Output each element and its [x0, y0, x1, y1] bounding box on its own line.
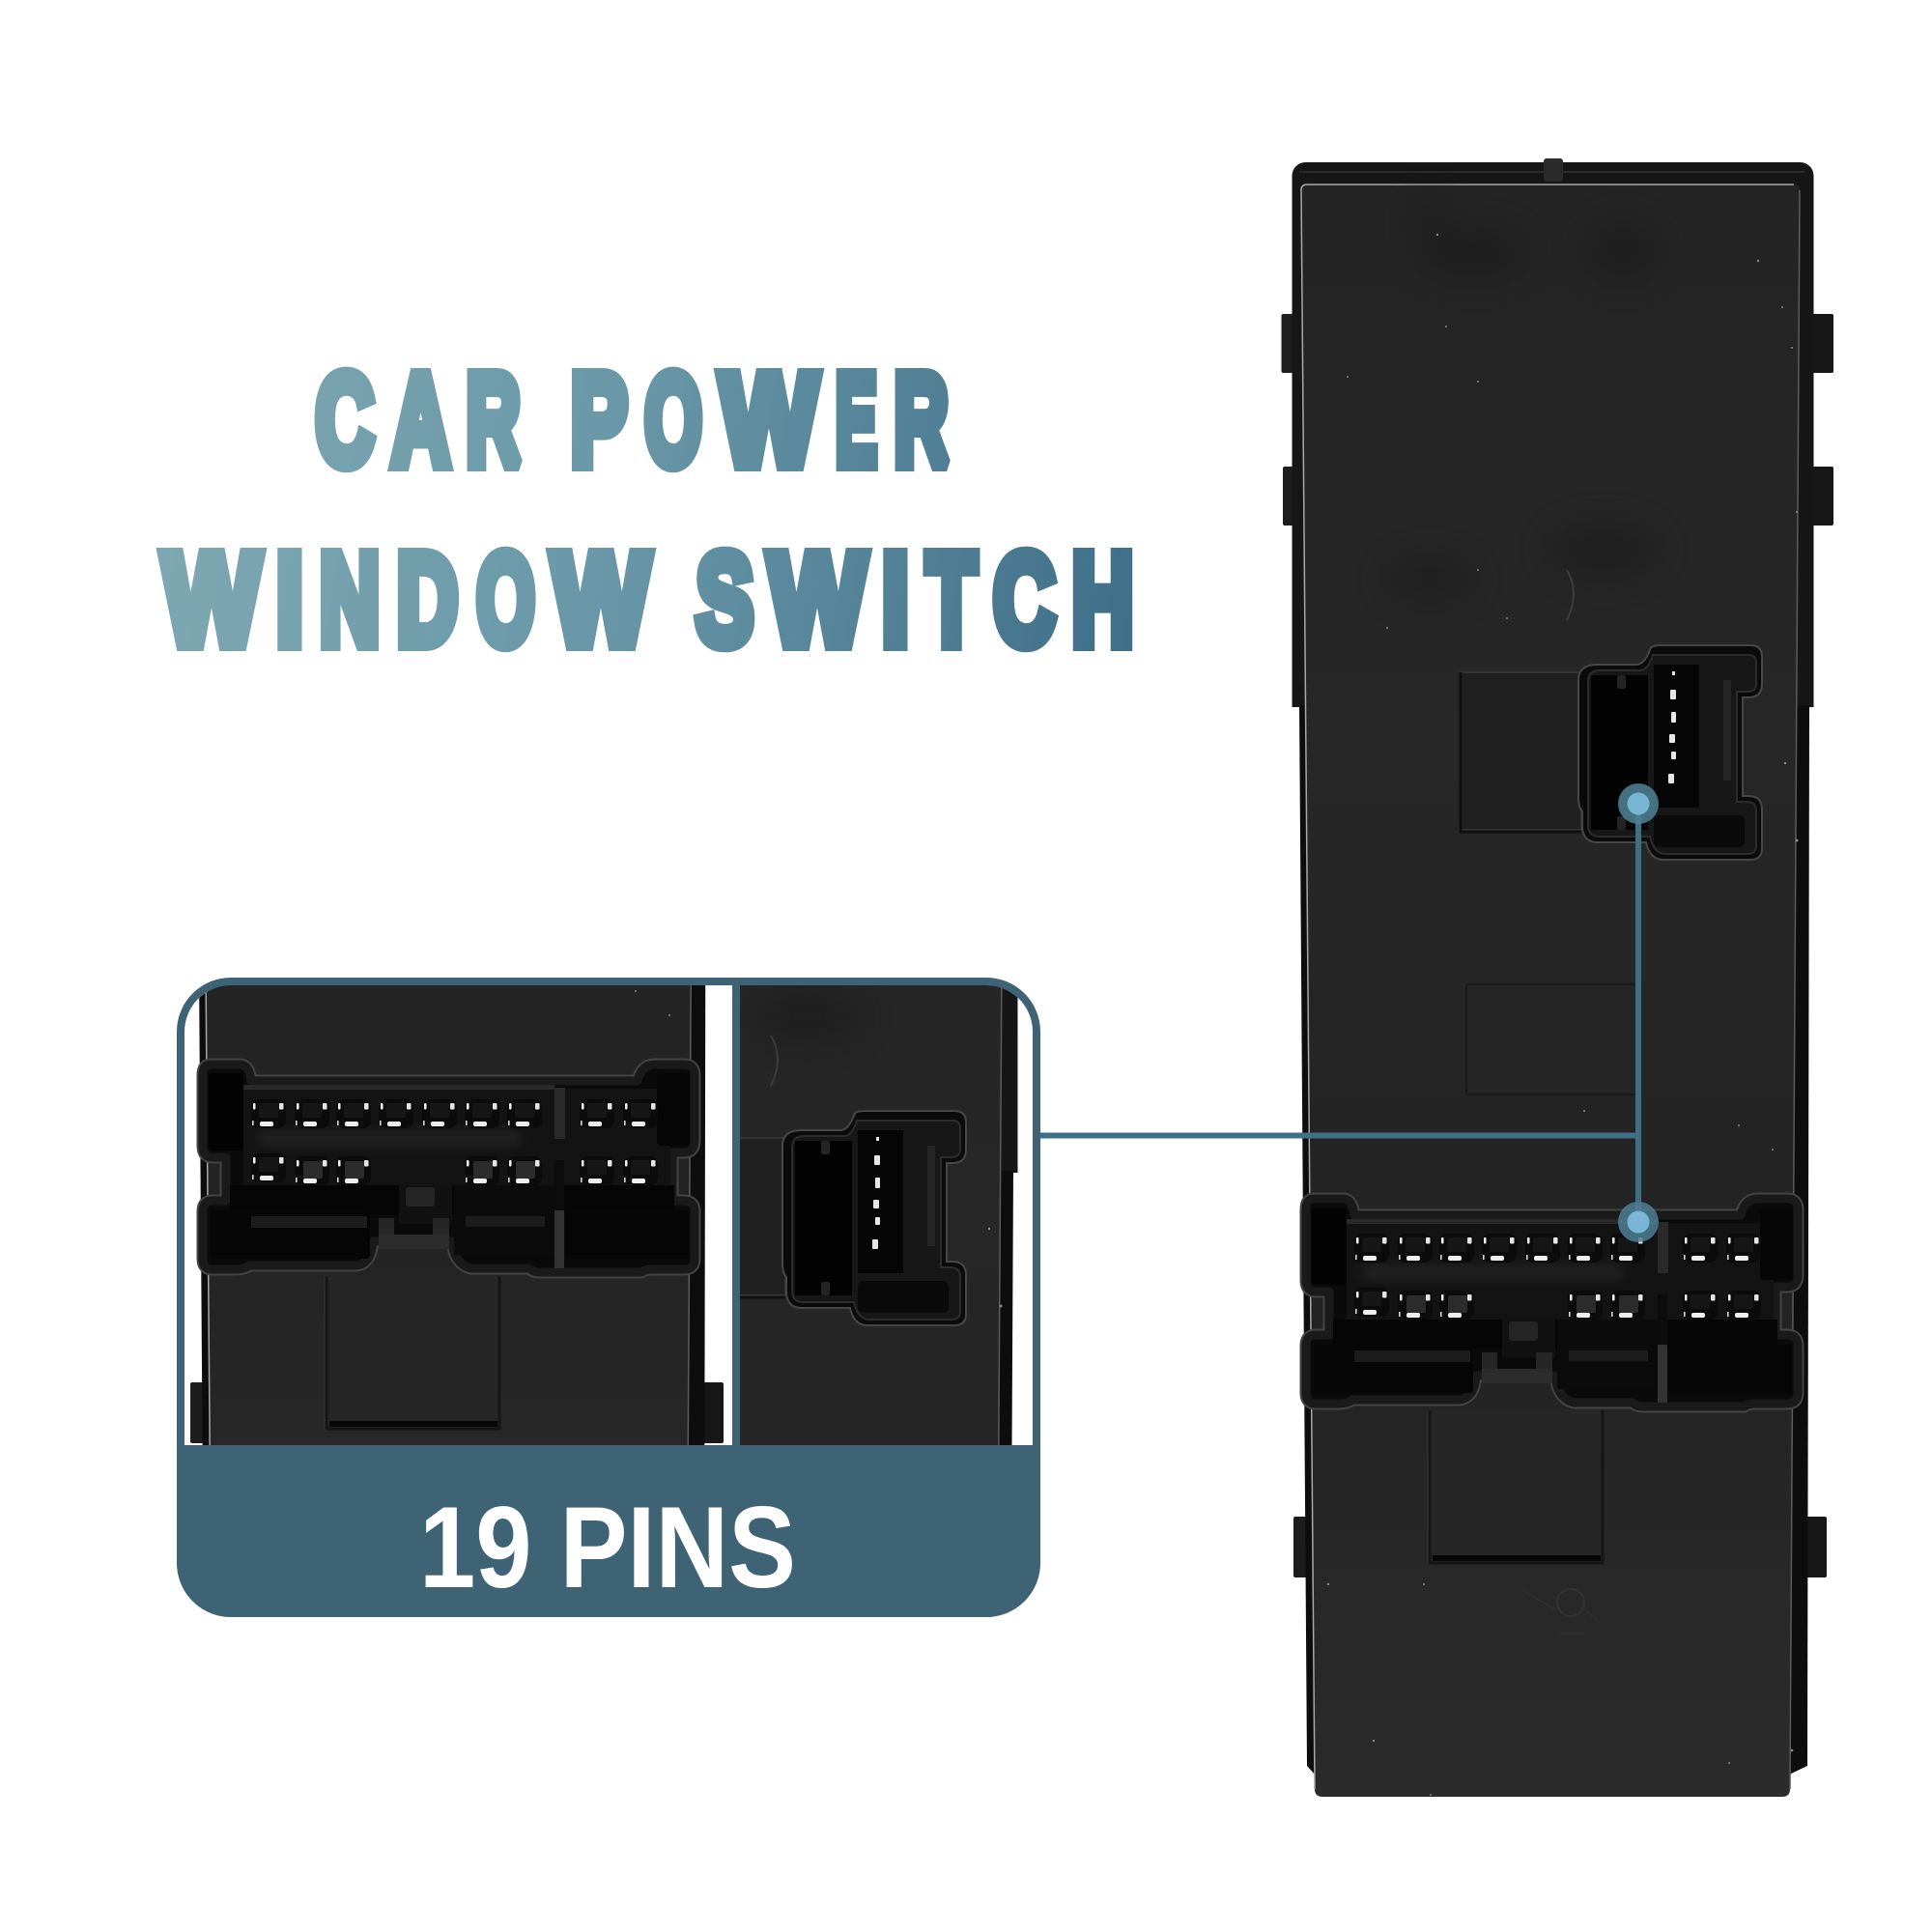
- title line 2: S: [696, 527, 753, 672]
- inset photo: large connector: [190, 985, 724, 1445]
- title line 1: O: [645, 348, 701, 493]
- title line 1: P: [571, 348, 627, 493]
- title line 1: R: [895, 348, 949, 493]
- product photo: window switch underside: [1281, 158, 1833, 1797]
- title line 1: W: [721, 348, 818, 493]
- inset divider: [732, 981, 740, 1445]
- title line 2: O: [477, 527, 535, 672]
- title line 2: I: [276, 527, 303, 672]
- inset border: [181, 981, 1037, 1613]
- inset photo: small connector: [740, 985, 1018, 1445]
- title: [163, 348, 1133, 672]
- title line 1: C: [316, 348, 374, 493]
- callout dot: large connector: [1618, 1202, 1659, 1242]
- callout lines: [1040, 804, 1641, 1222]
- title line 2: W: [553, 527, 650, 672]
- callout dot: small connector: [1618, 783, 1659, 824]
- title line 2: H: [1072, 527, 1133, 672]
- title line 2: C: [993, 527, 1055, 672]
- title line 2: I: [882, 527, 909, 672]
- title line 2: T: [926, 527, 977, 672]
- title line 2: W: [769, 527, 867, 672]
- title line 1: A: [392, 348, 450, 493]
- title line 2: N: [320, 527, 380, 672]
- caption band: [177, 1445, 1040, 1617]
- caption text: 19 PINS: [419, 1483, 796, 1612]
- title line 1: E: [836, 348, 877, 493]
- title line 2: W: [163, 527, 261, 672]
- title line 2: D: [397, 527, 458, 672]
- title line 1: R: [467, 348, 521, 493]
- inset panel: 19 pins close-up: [177, 978, 1040, 1617]
